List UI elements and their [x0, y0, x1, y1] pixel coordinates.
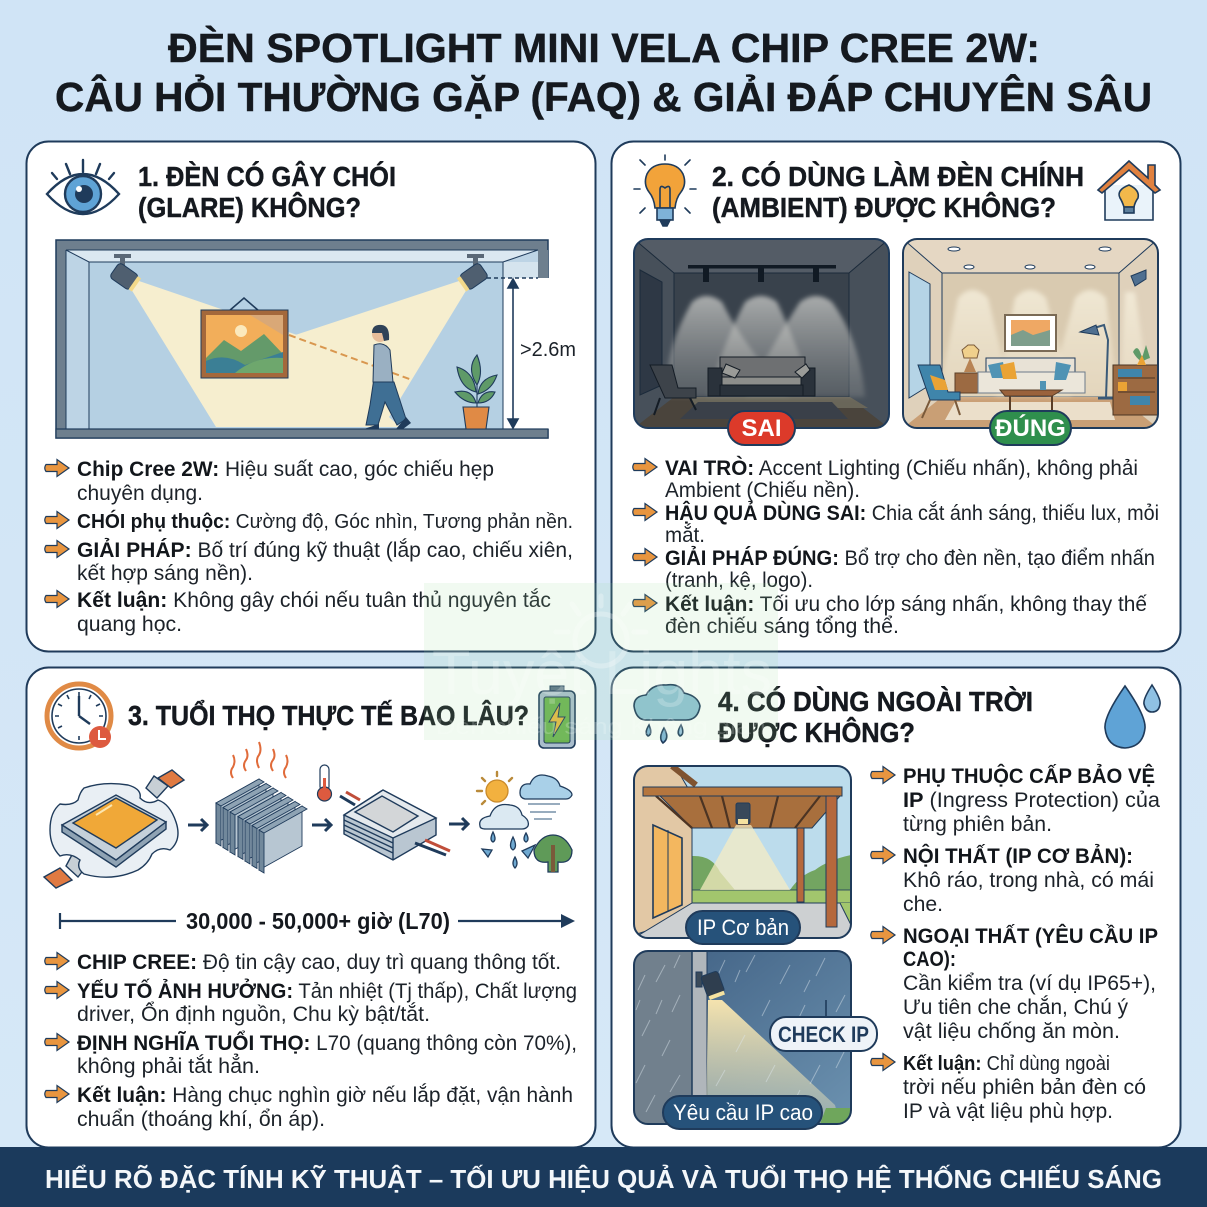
person [364, 325, 411, 429]
left spotlight [109, 254, 142, 292]
armchair [650, 365, 696, 398]
beams [666, 296, 865, 397]
bullets panel 4: Ưu tiên che chắn, Chú ý [903, 994, 1128, 1019]
title: CÂU HỎI THƯỜNG GẶP (FAQ) & GIẢI ĐÁP CHUYÊN SÂU [55, 74, 1152, 120]
title [55, 25, 1152, 120]
height label: >2.6m [520, 339, 576, 361]
panel: glare question [26, 142, 596, 652]
icon: eye [47, 160, 119, 214]
heading 2: 2. CÓ DÙNG LÀM ĐÈN CHÍNH [712, 161, 1084, 192]
bullets panel 4: NGOẠI THẤT (YÊU CẦU IP [903, 923, 1158, 948]
watermark [424, 583, 778, 740]
timeline with lifespan value [60, 908, 575, 934]
heading 1: (GLARE) KHÔNG? [138, 191, 361, 223]
lights [938, 290, 1150, 397]
window [640, 270, 662, 395]
bullets panel 4: CAO): [903, 947, 956, 971]
bullets panel 2: Kết luận: Tối ưu cho lớp sáng nhấn, không thay thế [665, 592, 1147, 616]
label: check IP [770, 1017, 877, 1051]
timeline with lifespan value: 30,000 - 50,000+ giờ (L70) [186, 908, 450, 934]
bullets panel 2: Ambient (Chiếu nền). [665, 478, 860, 502]
badge: correct: ĐÚNG [995, 414, 1066, 442]
bullets panel 4: Khô ráo, trong nhà, có mái [903, 868, 1154, 892]
rail and lamps [688, 265, 836, 268]
illustration: correct bright room [903, 239, 1158, 428]
watermark: Đèn chiếu sáng Không gian [436, 714, 766, 739]
badge: wrong: SAI [741, 415, 782, 442]
heading 2: (AMBIENT) ĐƯỢC KHÔNG? [712, 191, 1056, 223]
bullets panel 4: vật liệu chống ăn mòn. [903, 1019, 1120, 1043]
bullets panel 1: Chip Cree 2W: Hiệu suất cao, góc chiếu hẹp [77, 457, 494, 481]
arrow step 1 [188, 819, 207, 831]
label: basic IP [686, 911, 800, 944]
bullets panel 4: Kết luận: Chỉ dùng ngoài [903, 1052, 1110, 1075]
rug [680, 402, 848, 419]
bullets panel 1: Kết luận: Không gây chói nếu tuân thủ nguyên tắc [77, 587, 551, 612]
potted plant [455, 355, 497, 429]
right spotlight [456, 254, 489, 292]
wall lamp [1131, 270, 1146, 286]
icon: thermometer [318, 765, 332, 801]
height dimension arrow [487, 278, 538, 428]
footer banner: HIỂU RÕ ĐẶC TÍNH KỸ THUẬT – TỐI ƯU HIỆU QUẢ VÀ TUỔI THỌ HỆ THỐNG CHIẾU SÁNG [45, 1164, 1162, 1194]
floor lamp [1096, 324, 1109, 396]
bullets panel 1: quang học. [77, 612, 182, 636]
heading 4 [718, 686, 1033, 748]
badge: wrong [728, 411, 795, 445]
shelf and plant [1113, 365, 1158, 415]
bullets panel 2 [633, 455, 1159, 638]
coffee table [1000, 390, 1062, 396]
light beams [131, 281, 467, 427]
bullets panel 4 [871, 763, 1160, 1123]
bullets panel 2: (tranh, kệ, logo). [665, 568, 813, 592]
bullets panel 2: đèn chiếu sáng tổng thể. [665, 614, 899, 638]
icon: house with bulb [1098, 161, 1160, 220]
illustration: LED driver [340, 790, 450, 860]
heading 3: 3. TUỔI THỌ THỰC TẾ BAO LÂU? [128, 700, 529, 731]
icon: battery [539, 686, 575, 748]
heading 1 [138, 161, 396, 223]
illustration: wrong dark room [634, 239, 889, 428]
arrow step 3 [449, 818, 468, 830]
illustration: LED chip [44, 770, 184, 888]
bullets panel 4: NỘI THẤT (IP CƠ BẢN): [903, 843, 1133, 868]
bullets panel 3: driver, Ổn định nguồn, Chu kỳ bật/tắt. [77, 1001, 430, 1026]
framed picture [201, 298, 288, 378]
bullets panel 4: trời nếu phiên bản đèn có [903, 1075, 1146, 1099]
label: high IP required: Yêu cầu IP cao [673, 1100, 813, 1125]
bullets panel 4: Cần kiểm tra (ví dụ IP65+), [903, 971, 1156, 995]
title: ĐÈN SPOTLIGHT MINI VELA CHIP CREE 2W: [168, 25, 1040, 71]
bullets panel 3: CHIP CREE: Độ tin cậy cao, duy trì quang thông tốt. [77, 950, 561, 974]
panel: outdoor question [612, 668, 1180, 1148]
bullets panel 3 [45, 950, 577, 1131]
label: check IP: CHECK IP [778, 1022, 869, 1047]
icon: water drops [1105, 685, 1160, 748]
footer banner [0, 1147, 1207, 1207]
bullets panel 1: CHÓI phụ thuộc: Cường độ, Góc nhìn, Tương phản nền. [77, 509, 573, 533]
bullets panel 2: GIẢI PHÁP ĐÚNG: Bổ trợ cho đèn nền, tạo điểm nhấn [665, 545, 1155, 570]
window [909, 272, 930, 398]
armchair [918, 365, 960, 400]
bullets panel 1: kết hợp sáng nền). [77, 561, 253, 585]
sofa [720, 357, 805, 377]
bullets panel 3: không phải tắt hẳn. [77, 1053, 260, 1078]
bullets panel 2: mắt. [665, 522, 705, 547]
heading 4: ĐƯỢC KHÔNG? [718, 716, 915, 748]
bullets panel 3: Kết luận: Hàng chục nghìn giờ nếu lắp đặt, vận hành [77, 1082, 573, 1107]
sight line [289, 335, 412, 380]
badge: correct [990, 411, 1071, 445]
heading 2 [712, 161, 1084, 223]
bullets panel 4: che. [903, 892, 943, 916]
bullets panel 4: từng phiên bản. [903, 812, 1052, 836]
bullets panel 2: VAI TRÒ: Accent Lighting (Chiếu nhấn), không phải [665, 455, 1138, 480]
bullets panel 3: chuẩn (thoáng khí, ổn áp). [77, 1107, 325, 1131]
bullets panel 4: IP (Ingress Protection) của [903, 788, 1160, 812]
arrow step 2 [312, 819, 331, 831]
bullets panel 3: YẾU TỐ ẢNH HƯỞNG: Tản nhiệt (Tj thấp), Chất lượng [77, 977, 577, 1003]
heading 4: 4. CÓ DÙNG NGOÀI TRỜI [718, 686, 1033, 717]
label: basic IP: IP Cơ bản [697, 915, 789, 940]
wall picture [1005, 315, 1056, 351]
bullets panel 1: GIẢI PHÁP: Bố trí đúng kỹ thuật (lắp cao, chiếu xiên, [77, 537, 573, 562]
icon: light bulb [634, 155, 696, 226]
table lamp [962, 345, 979, 358]
icon group: weather and tree [477, 772, 572, 872]
bullets panel 4: PHỤ THUỘC CẤP BẢO VỆ [903, 763, 1155, 788]
heading 1: 1. ĐÈN CÓ GÂY CHÓI [138, 161, 396, 192]
bullets panel 3: ĐỊNH NGHĨA TUỔI THỌ: L70 (quang thông còn 70%), [77, 1030, 577, 1055]
illustration: heat sink [216, 742, 307, 873]
bullets panel 1 [45, 457, 573, 636]
panel: ambient question [612, 142, 1180, 652]
bullets panel 2: HẬU QUẢ DÙNG SAI: Chia cắt ánh sáng, thiếu lux, mỏi [665, 500, 1159, 525]
panel: lifespan question [26, 668, 596, 1148]
illustration: rainy wall [634, 951, 851, 1124]
watermark: Tuyệt Lights [432, 639, 772, 708]
icon: rain cloud [634, 685, 700, 743]
bullets panel 4: IP và vật liệu phù hợp. [903, 1099, 1113, 1123]
illustration: room cross-section with spotlights [56, 240, 549, 438]
sofa [986, 358, 1076, 372]
illustration: covered porch [634, 766, 851, 938]
bullets panel 1: chuyên dụng. [77, 481, 203, 505]
icon: clock [47, 684, 111, 748]
